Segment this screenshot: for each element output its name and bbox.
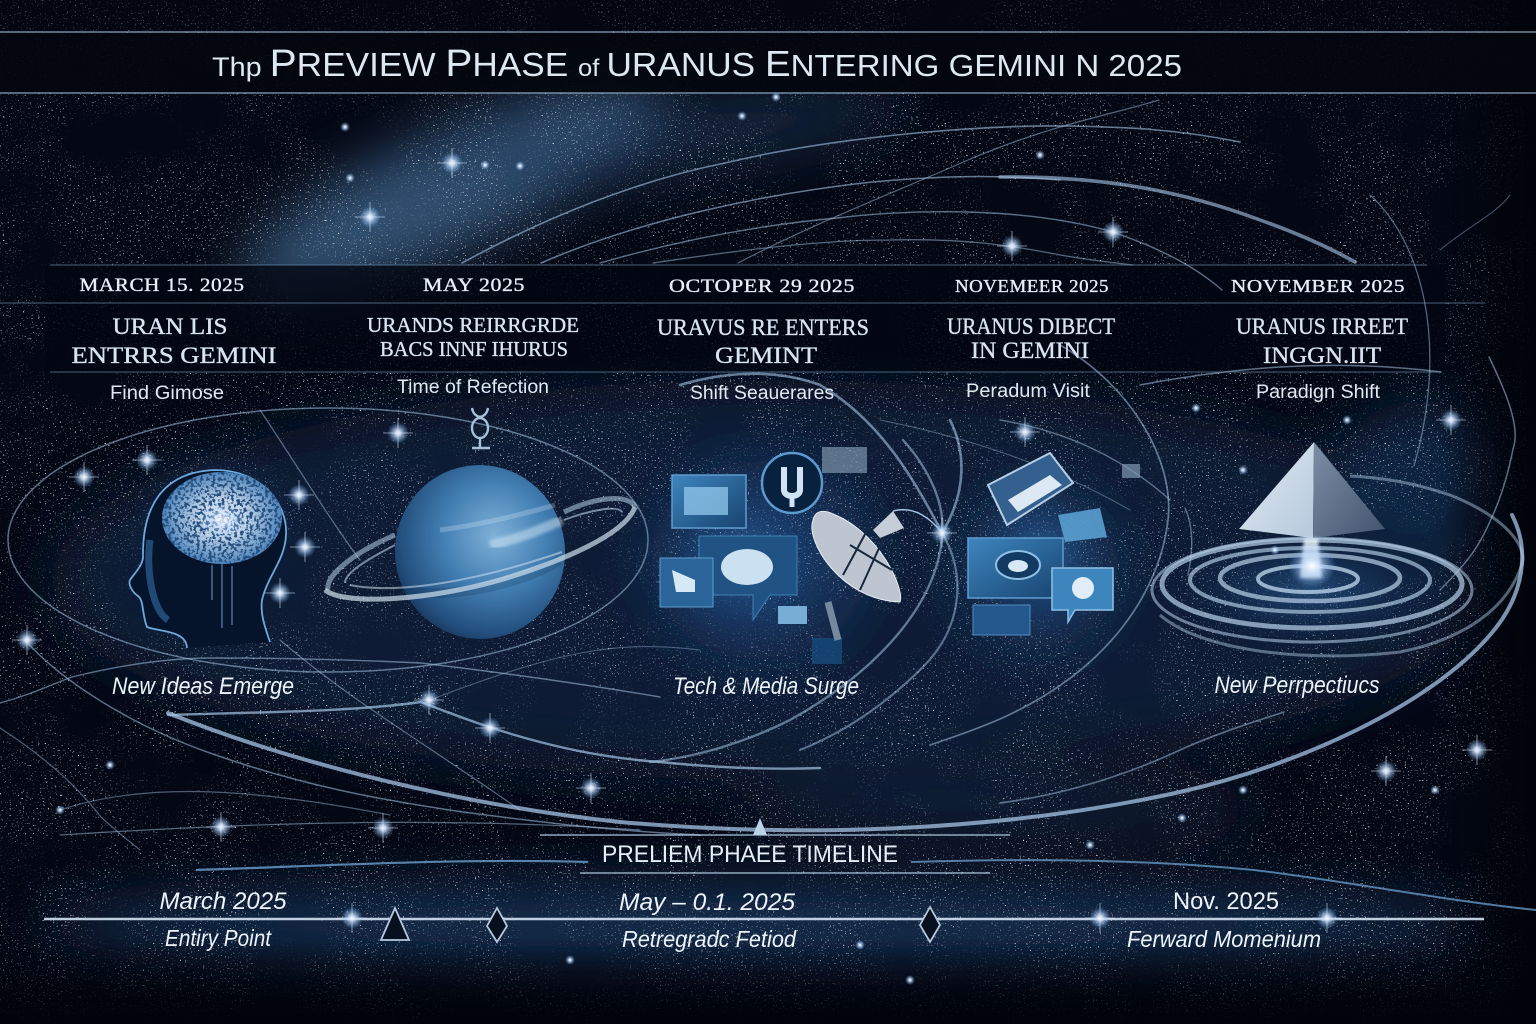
base tile [812, 638, 842, 664]
marker: diamond [487, 908, 507, 942]
heading line 2: BACS INNF IHURUS [380, 337, 568, 361]
orbit lines [0, 100, 1522, 850]
heading line 2: ENTRRS GEMINI [72, 343, 276, 368]
screen [973, 605, 1030, 635]
front rings [325, 507, 635, 599]
planet bands [400, 505, 562, 593]
media icons cluster [635, 447, 942, 665]
head silhouette [129, 470, 286, 648]
satellite dish [812, 510, 942, 640]
icon: pyramid and ripples [1140, 442, 1523, 660]
chat bubble [721, 549, 773, 585]
brain speckle [162, 472, 282, 564]
icon: Uranus glyph [472, 408, 490, 448]
heading: URAVUS RE ENTERS [657, 315, 869, 340]
banner curve left [196, 861, 588, 870]
chat tile [1052, 568, 1113, 622]
peak marker [753, 818, 767, 835]
subheading: Shift Seauerares [690, 383, 834, 404]
banner curve right [911, 860, 1536, 910]
date: NOVEMBER 2025 [1231, 276, 1405, 296]
subheading: Find Gimose [110, 383, 224, 404]
screen glyph [996, 551, 1040, 579]
back rings [328, 499, 635, 590]
media icons cluster 2 [955, 453, 1140, 655]
caption: New Ideas Emerge: New Ideas Emerge [112, 673, 294, 700]
face shading [149, 540, 168, 620]
subheading: Paradign Shift [1256, 382, 1381, 403]
heading line 2: IN GEMINI [971, 338, 1089, 363]
light core [1288, 544, 1336, 588]
brain core [198, 502, 246, 538]
date: March: March 2025 [160, 888, 287, 915]
brain stem [212, 564, 232, 628]
date: MARCH 15. 2025 [80, 275, 244, 296]
screen [660, 558, 713, 607]
dark header band [45, 265, 1445, 372]
date: May: May – 0.1. 2025 [619, 889, 796, 916]
timeline panel [44, 818, 1536, 952]
title text: Thp PREVIEW PHASE of URANUS ENTERING GEMINI N 2025 [212, 43, 1182, 85]
marker: triangle [381, 908, 409, 940]
small tile [1122, 464, 1140, 478]
subheading: Peradum Visit [966, 381, 1091, 402]
light beam [1300, 538, 1322, 578]
date: MAY 2025 [423, 275, 525, 296]
edge vignette right [1440, 0, 1536, 1024]
caption: Tech and Media Surge: Tech & Media Surge [673, 673, 859, 700]
date: OCTOPER 29 2025 [669, 276, 855, 297]
date: Nov: Nov. 2025 [1173, 888, 1279, 915]
timeline axis [44, 918, 1484, 920]
planet with rings [325, 454, 635, 650]
label: Forward Momentum: Ferward Momenium [1127, 926, 1321, 952]
dark title band [0, 33, 1536, 93]
title [0, 32, 1536, 93]
label: Retrograde period: Retregradc Fetiod [622, 926, 797, 952]
panel: November direct [947, 276, 1115, 402]
timeline heading: PRELIEM PHAEE TIMELINE [602, 841, 898, 868]
planet body [384, 454, 576, 650]
brain base [162, 472, 282, 564]
tilted screen [988, 453, 1073, 525]
panel: November shift [1231, 276, 1408, 403]
headset badge [762, 453, 822, 513]
tilted screen content [1008, 475, 1062, 512]
heading: URANUS DIBECT [947, 314, 1115, 339]
label: Entry Point: Entiry Point [165, 925, 272, 951]
media screen [672, 475, 746, 528]
heading: URAN LIS [112, 314, 228, 339]
screen glyph core [1008, 560, 1028, 572]
pyramid [1239, 442, 1314, 538]
subheading: Time of Refection [397, 377, 549, 398]
water glow [1140, 520, 1480, 660]
icon: glowing head with brain [115, 435, 315, 648]
ripples [1152, 476, 1523, 656]
panel: October 29 [657, 276, 869, 404]
dark top strip [0, 0, 1536, 32]
header rules [0, 265, 1485, 372]
media screen glyph [684, 487, 728, 515]
edge vignette bottom [0, 940, 1536, 1024]
tilted tile [1058, 508, 1107, 542]
panel: March 15 [72, 275, 276, 404]
chat panel [699, 536, 797, 620]
heading line 2: GEMINT [715, 343, 817, 368]
screen glyph [672, 570, 695, 592]
panel: May 2025 [367, 275, 579, 398]
chat dot [1072, 577, 1094, 599]
heading: URANUS IRREET [1236, 314, 1408, 339]
small tile [822, 447, 867, 473]
heading: URANDS REIRRGRDE [367, 313, 579, 337]
timeline heading rules [540, 835, 1010, 873]
caption: New Perspectives: New Perrpectiucs [1214, 672, 1380, 699]
title rules [0, 32, 1536, 93]
small tile [778, 606, 807, 624]
screen [968, 538, 1063, 598]
heading line 2: INGGN.IIT [1263, 343, 1381, 368]
marker: diamond [920, 907, 940, 942]
date: NOVEMEER 2025 [955, 276, 1109, 296]
